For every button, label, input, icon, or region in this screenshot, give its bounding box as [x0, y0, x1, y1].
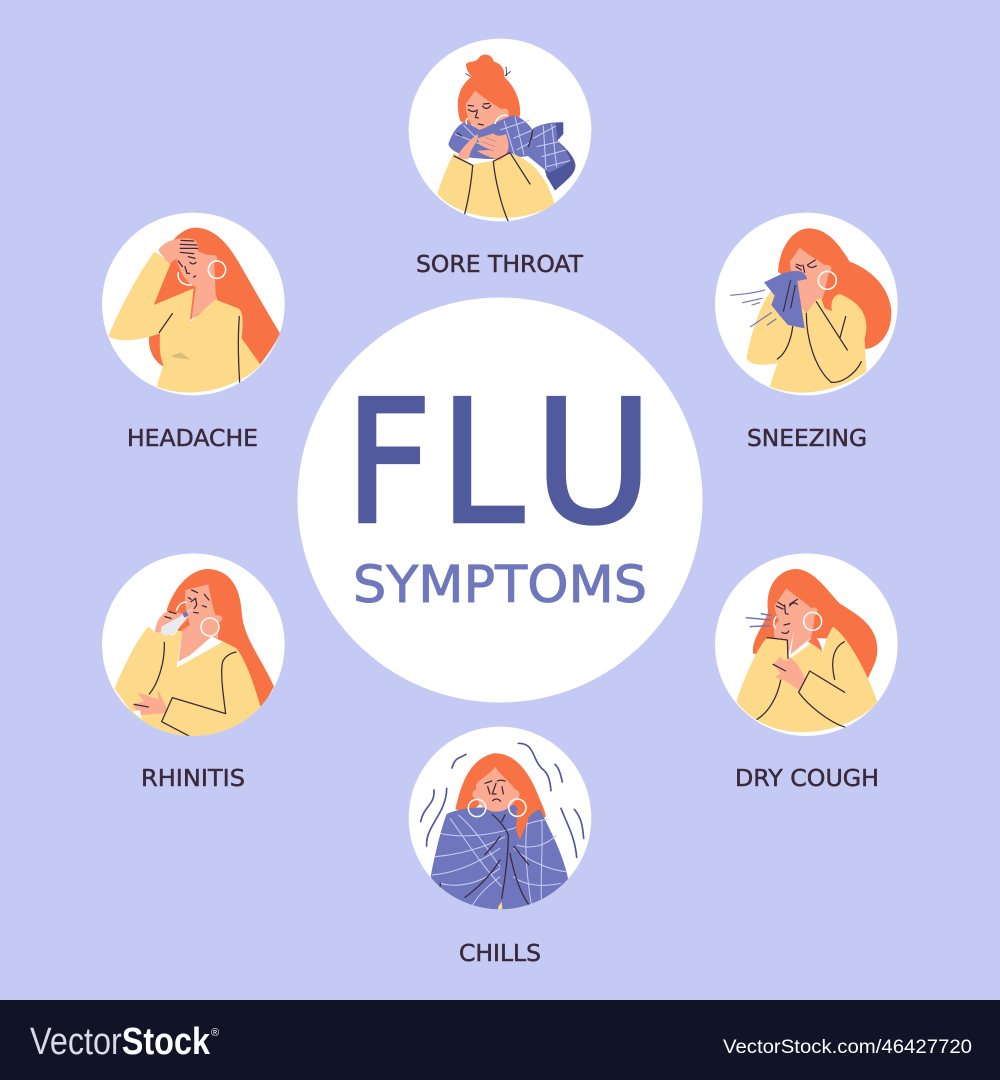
icon circle: headache: [102, 213, 285, 395]
label: sore throat: SORE THROAT: [416, 252, 584, 278]
title: FLU: F: [345, 364, 432, 562]
icon circle: sneezing: [715, 213, 898, 395]
footer bar: [0, 1000, 1000, 1080]
footer url: VectorStock.com/46427720: [723, 1036, 972, 1058]
label: chills: CHILLS: [459, 941, 541, 967]
title: FLU: L: [440, 364, 524, 562]
label: dry cough: DRY COUGH: [735, 766, 879, 792]
panel: sneezing: [715, 213, 898, 452]
registered mark: ®: [211, 1027, 219, 1039]
title: FLU: U: [534, 364, 653, 562]
icon circle: dry cough: [715, 553, 898, 736]
icon circle: chills: [409, 727, 591, 912]
panel: dry cough: [715, 553, 898, 792]
footer logo: VectorStock: [30, 1021, 211, 1063]
label: sneezing: SNEEZING: [747, 426, 867, 452]
panel: sore throat: [409, 39, 591, 278]
panel: rhinitis: [102, 553, 285, 792]
label: rhinitis: RHINITIS: [141, 766, 245, 792]
icon circle: sore throat: [409, 39, 591, 222]
title: FLU: [345, 364, 653, 562]
panel: chills: [409, 727, 591, 967]
label: headache: HEADACHE: [127, 426, 258, 452]
panel: headache: [102, 213, 285, 452]
central circle panel: [298, 298, 702, 702]
subtitle: SYMPTOMS: SYMPTOMS: [353, 556, 647, 615]
icon circle: rhinitis: [102, 553, 285, 737]
